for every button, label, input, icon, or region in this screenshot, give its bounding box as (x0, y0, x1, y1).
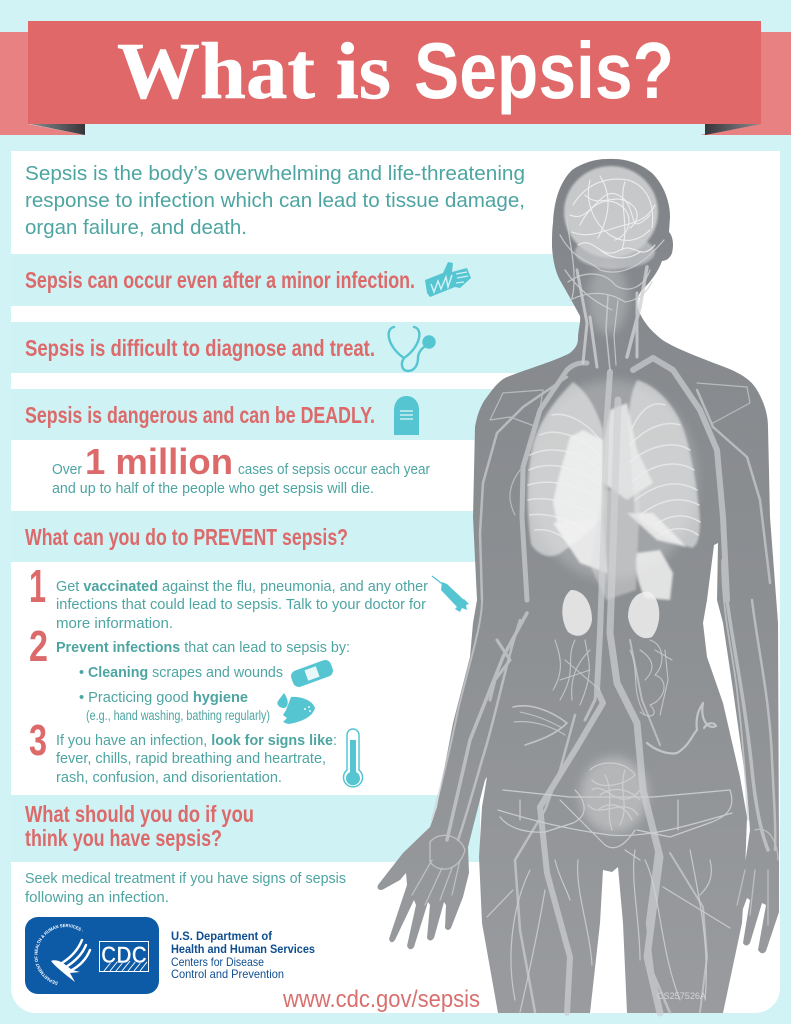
step 2: prevent infections: 2 (29, 622, 48, 671)
step 1: vaccination: more information. (56, 616, 173, 632)
advice text: Seek medical treatment if you have signs of sepsis (25, 870, 346, 887)
title: Sepsis? (414, 26, 674, 115)
heading: prevent sepsis: What can you do to PREVENT sepsis? (25, 524, 348, 550)
icon: bandage (289, 658, 335, 689)
step 2: prevent infections: Prevent infections that can lead to sepsis by: (56, 640, 350, 656)
agency name: Health and Human Services (171, 942, 315, 956)
step 3: signs of infection: rash, confusion, and disorientation. (56, 770, 282, 786)
body silhouette (378, 159, 779, 1013)
heading: minor infection: Sepsis can occur even after a minor infection. (25, 267, 415, 293)
right ovary artery loop (647, 703, 716, 753)
icon: tombstone (394, 396, 419, 435)
light blue stripes behind headings (11, 254, 591, 862)
HHS seal (34, 924, 92, 985)
agency name: U.S. Department of (171, 929, 273, 943)
heading: what should you do (25, 801, 254, 851)
step 2: prevent infections: • Practicing good hygiene (79, 690, 248, 706)
heading: difficult to diagnose: Sepsis is difficult to diagnose and treat. (25, 335, 375, 361)
icon: stethoscope (389, 327, 434, 371)
advice text (25, 870, 346, 906)
title banner ribbon (0, 21, 791, 135)
title: What is (117, 28, 391, 116)
step 2: prevent infections: (e.g., hand washing, bathing regularly) (86, 708, 270, 723)
statistic: 1 million cases (52, 441, 430, 497)
heading: what should you do: What should you do if you (25, 801, 254, 827)
heart and liver (553, 403, 687, 600)
agency name (171, 929, 315, 981)
CDC mark: CDC (101, 942, 147, 969)
agency name: Control and Prevention (171, 967, 284, 981)
kidneys (562, 590, 659, 638)
face and neck lightening (588, 262, 628, 334)
human body with circulatory system (378, 159, 779, 1013)
step 3: signs of infection: If you have an infection, look for signs like: (56, 733, 337, 749)
step 1: vaccination: infections that could lead to sepsis. Talk to your doctor for (56, 597, 426, 613)
intro text: Sepsis is the body’s overwhelming and life-threatening (25, 162, 525, 185)
step 3: signs of infection: fever, chills, rapid breathing and heartrate, (56, 751, 326, 767)
brain (560, 166, 664, 310)
publication code: CS257526A (657, 991, 706, 1001)
step 1: vaccination: 1 (29, 560, 46, 612)
intro text: organ failure, and death. (25, 216, 247, 239)
icon: syringe (432, 576, 469, 612)
HHS seal: DEPARTMENT OF HEALTH & HUMAN SERVICES · USA (34, 924, 83, 985)
statistic: 1 million cases: cases of sepsis occur each year (238, 462, 430, 478)
logo: HHS and CDC (25, 917, 159, 994)
statistic: 1 million cases: Over (52, 461, 82, 478)
pelvic vessels (498, 757, 732, 860)
advice text: following an infection. (25, 889, 169, 906)
step 3: signs of infection: 3 (29, 716, 47, 765)
icon: bandaged hand (425, 262, 471, 297)
icon: water drop and washing hand (277, 693, 315, 724)
intro text (25, 162, 525, 239)
icon: thermometer (344, 729, 363, 787)
step 1: vaccination (29, 560, 428, 632)
website url: www.cdc.gov/sepsis (282, 986, 480, 1013)
abdominal vessel network (513, 640, 672, 745)
step 2: prevent infections (29, 622, 350, 723)
intro text: response to infection which can lead to tissue damage, (25, 189, 525, 212)
statistic: 1 million cases: 1 million (85, 441, 233, 482)
heading: what should you do: think you have sepsis? (25, 825, 222, 851)
lungs (528, 380, 700, 556)
heading: deadly: Sepsis is dangerous and can be DEADLY. (25, 402, 375, 428)
step 2: prevent infections: • Cleaning scrapes and wounds (79, 665, 283, 681)
chest lightening (527, 380, 697, 580)
step 1: vaccination: Get vaccinated against the flu, pneumonia, and any other (56, 579, 428, 595)
statistic: 1 million cases: and up to half of the people who get sepsis will die. (52, 481, 374, 497)
leg vessels (487, 850, 730, 1012)
main arteries and veins (412, 358, 778, 1013)
neck vessels (577, 267, 647, 370)
step 3: signs of infection (29, 716, 337, 786)
agency name: Centers for Disease (171, 955, 264, 969)
